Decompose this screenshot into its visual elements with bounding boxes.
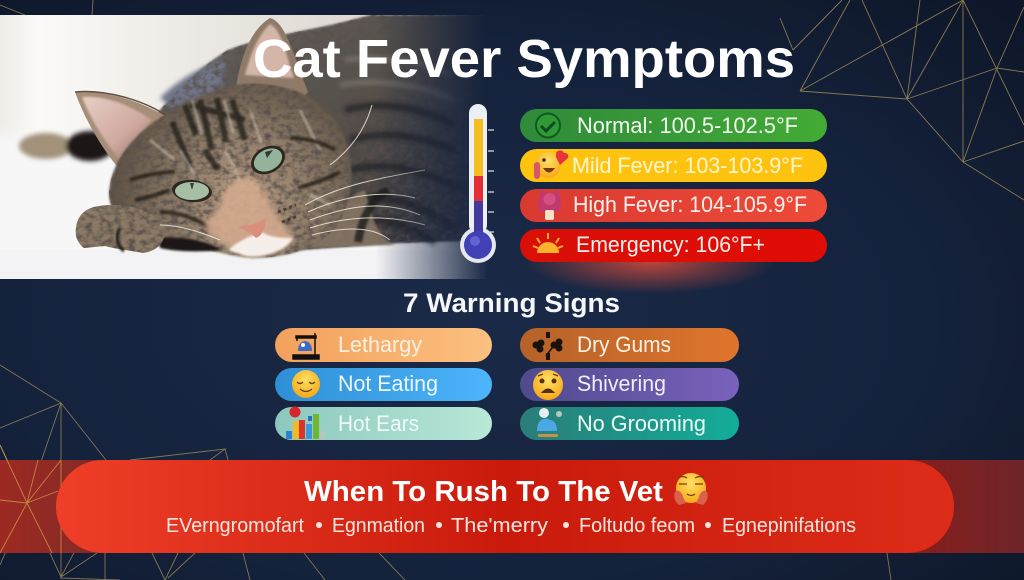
sign: hot ears: Hot Ears (338, 411, 419, 436)
banner list: Egnepinifations (722, 515, 856, 537)
range: emergency: Emergency: 106°F+ (576, 232, 765, 257)
range: high fever: High Fever: 104-105.9°F (573, 192, 807, 217)
range: high fever (520, 189, 827, 222)
banner: when to rush to the vet (56, 460, 954, 553)
cat head (109, 84, 351, 258)
decorative gold polygon lines: top right (780, 0, 1024, 200)
photo: tabby cat lying on white rug (0, 15, 484, 279)
banner list: Egnmation (332, 515, 425, 537)
cat nose (238, 218, 266, 238)
sign: dry gums: Dry Gums (577, 332, 671, 357)
panel: warning signs (275, 328, 739, 440)
sign: not eating (275, 368, 492, 401)
banner list: The'merry (451, 515, 548, 537)
gold lines over stripe (0, 445, 61, 553)
range: normal (520, 109, 827, 142)
forehead tabby stripes (172, 98, 245, 170)
banner heading: When To Rush To The Vet (304, 476, 663, 508)
panel: temperature ranges (520, 109, 827, 262)
sign: lethargy (275, 328, 492, 362)
cat whiskers (160, 105, 425, 240)
thermometer (460, 104, 496, 263)
icon: blushing face emoji (674, 473, 708, 505)
photo backdrop: wall and white rug (0, 15, 484, 279)
range: mild fever: Mild Fever: 103-103.9°F (572, 153, 803, 178)
cat right eye (251, 146, 285, 174)
red glow under emergency pill (525, 230, 775, 294)
cat body (157, 15, 481, 252)
sign: no grooming: No Grooming (577, 411, 706, 436)
cat right ear (236, 18, 308, 102)
range: normal: Normal: 100.5-102.5°F (577, 113, 798, 138)
sign: lethargy: Lethargy (338, 332, 422, 357)
sign: dry gums (520, 328, 739, 362)
sign: not eating: Not Eating (338, 371, 438, 396)
heading: 7 warning signs: 7 Warning Signs (403, 288, 620, 318)
muzzle (205, 178, 295, 256)
sign: shivering (520, 368, 739, 401)
cat left eye (172, 180, 212, 202)
banner list: EVerngromofart (166, 515, 304, 537)
cat tail, blurred in background (19, 131, 114, 161)
banner: red background stripe (0, 460, 1024, 553)
shadow under chin (158, 238, 222, 251)
banner list: Foltudo feom (579, 515, 695, 537)
sign: shivering: Shivering (577, 371, 666, 396)
range: emergency (520, 229, 827, 262)
banner list (166, 515, 856, 537)
cat left ear (74, 90, 166, 166)
sign: no grooming (520, 407, 739, 440)
title: Cat Fever Symptoms (253, 29, 795, 89)
range: mild fever (520, 149, 827, 182)
cat front paw (76, 205, 165, 253)
sign: hot ears (275, 406, 492, 440)
